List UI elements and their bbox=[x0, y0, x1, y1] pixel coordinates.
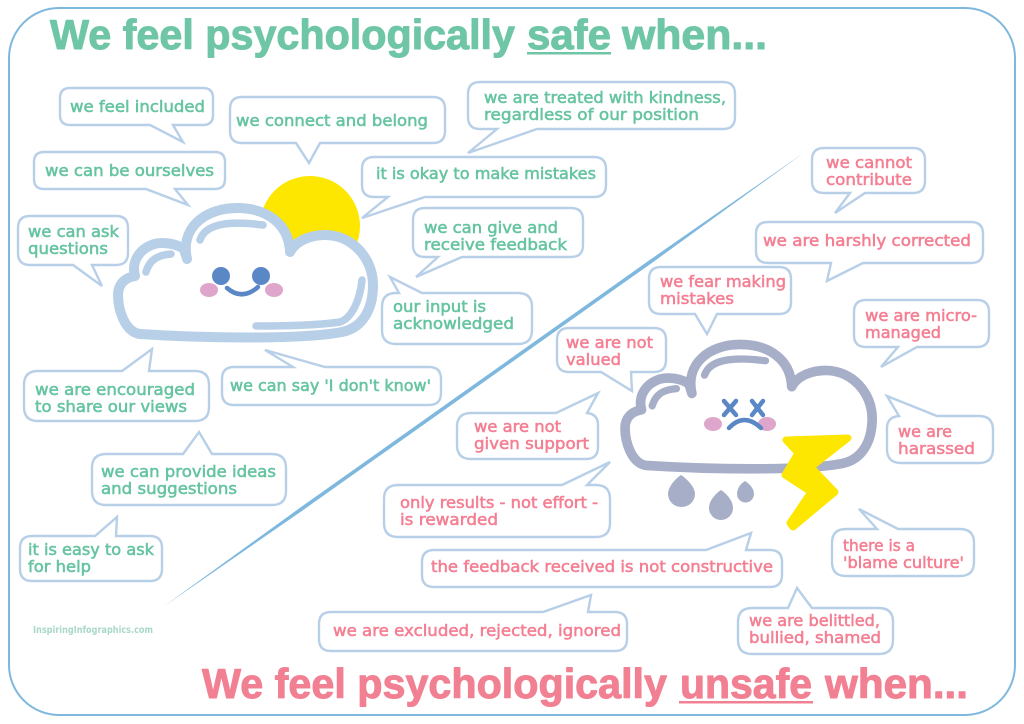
bubble: micro-managed: managed bbox=[865, 323, 941, 342]
bubble: not valued: valued bbox=[566, 350, 621, 369]
bubble: encouraged to share: to share our views bbox=[35, 397, 187, 416]
title: safe: safe bbox=[527, 11, 611, 58]
bubble: blame culture bbox=[832, 509, 974, 576]
bubble: we connect and belong: we connect and belong bbox=[236, 111, 428, 130]
icon: happy cloud bbox=[118, 208, 373, 338]
icon: sad cloud bbox=[625, 344, 872, 469]
title: unsafe: We feel psychologically bbox=[202, 660, 668, 707]
title: unsafe: when... bbox=[824, 660, 968, 707]
happy face bbox=[200, 267, 283, 297]
bubble: we can be ourselves: we can be ourselves bbox=[45, 161, 214, 180]
bubble: fear making mistakes: mistakes bbox=[660, 289, 734, 308]
bubble: our input is acknowledged bbox=[382, 277, 532, 344]
bubble: ideas and suggestions bbox=[92, 432, 286, 505]
bubble: easy to ask for help bbox=[20, 517, 162, 581]
bubble: not valued bbox=[557, 328, 666, 391]
bubble: I don't know: we can say 'I don't know' bbox=[230, 376, 431, 395]
bubble: easy to ask for help: it is easy to ask bbox=[28, 540, 155, 559]
icon: lightning bolt bbox=[785, 438, 848, 527]
bubble: treated with kindness: we are treated with kindness, bbox=[484, 88, 726, 107]
bubble: excluded rejected ignored bbox=[319, 595, 627, 651]
bubble: give and receive feedback: receive feedback bbox=[424, 235, 568, 254]
bubble: feedback not constructive: the feedback received is not constructive bbox=[431, 557, 773, 576]
bubble: give and receive feedback: we can give and bbox=[424, 218, 558, 237]
bubble: not given support bbox=[457, 393, 598, 459]
bubble: only results rewarded: is rewarded bbox=[400, 510, 498, 529]
icon: rain drops bbox=[668, 475, 754, 520]
bubble: harassed: harassed bbox=[898, 439, 975, 458]
bubble: okay to make mistakes: it is okay to make mistakes bbox=[376, 164, 596, 183]
bubble: not valued: we are not bbox=[566, 333, 653, 352]
bubble: micro-managed: we are micro- bbox=[865, 306, 977, 325]
bubble: okay to make mistakes bbox=[362, 157, 606, 218]
bubble: we can ask questions bbox=[18, 216, 128, 286]
bubble: cannot contribute: we cannot bbox=[826, 153, 912, 172]
bubble: I don't know bbox=[222, 350, 441, 405]
bubble: not given support: we are not bbox=[474, 417, 561, 436]
bubble: blame culture: there is a bbox=[843, 536, 915, 555]
bubble: harassed: we are bbox=[898, 422, 952, 441]
bubble: we feel included bbox=[60, 88, 213, 142]
bubble: not given support: given support bbox=[474, 434, 589, 453]
bubble: excluded rejected ignored: we are excluded, rejected, ignored bbox=[333, 621, 621, 640]
bubble: harshly corrected bbox=[756, 222, 983, 281]
bubble: our input is acknowledged: our input is bbox=[393, 297, 486, 316]
bubble: harassed bbox=[887, 396, 993, 463]
bubble: fear making mistakes bbox=[649, 267, 791, 334]
bubble: easy to ask for help: for help bbox=[28, 557, 91, 576]
bubble: ideas and suggestions: we can provide ideas bbox=[101, 462, 276, 481]
watermark: InspiringInfographics.com bbox=[33, 625, 153, 636]
bubble: give and receive feedback bbox=[413, 208, 583, 277]
title: safe: when... bbox=[621, 11, 767, 58]
bubble: belittled bullied shamed: bullied, shamed bbox=[749, 628, 881, 647]
bubble: cannot contribute bbox=[812, 148, 925, 213]
bubble: treated with kindness bbox=[468, 82, 735, 153]
title: safe bbox=[50, 11, 767, 58]
bubble: feedback not constructive bbox=[422, 533, 782, 587]
diagonal divider bbox=[163, 152, 805, 607]
bubble: blame culture: 'blame culture' bbox=[843, 553, 964, 572]
bubble: we can be ourselves bbox=[34, 152, 225, 205]
bubble: fear making mistakes: we fear making bbox=[660, 272, 786, 291]
sad face bbox=[704, 401, 776, 431]
bubble: harshly corrected: we are harshly corrected bbox=[763, 231, 971, 250]
bubble: only results rewarded bbox=[384, 462, 610, 537]
bubble: only results rewarded: only results - not effort - bbox=[400, 493, 598, 512]
icon: sun bbox=[260, 176, 360, 276]
bubble: ideas and suggestions: and suggestions bbox=[101, 479, 237, 498]
title: safe: We feel psychologically bbox=[50, 11, 516, 58]
bubble: encouraged to share: we are encouraged bbox=[35, 380, 195, 399]
bubble: treated with kindness: regardless of our position bbox=[484, 105, 699, 124]
bubble: belittled bullied shamed: we are belittled, bbox=[749, 611, 880, 630]
bubble: we feel included: we feel included bbox=[70, 97, 205, 116]
bubble: our input is acknowledged: acknowledged bbox=[393, 314, 514, 333]
bubble: we can ask questions: questions bbox=[28, 239, 108, 258]
title: unsafe bbox=[202, 660, 968, 707]
bubble: we connect and belong bbox=[230, 97, 445, 163]
bubble: belittled bullied shamed bbox=[738, 588, 893, 654]
bubble: cannot contribute: contribute bbox=[826, 170, 912, 189]
title: unsafe: unsafe bbox=[680, 660, 812, 707]
bubble: micro-managed bbox=[854, 300, 989, 367]
bubble: we can ask questions: we can ask bbox=[28, 222, 120, 241]
bubble: encouraged to share bbox=[24, 349, 209, 421]
